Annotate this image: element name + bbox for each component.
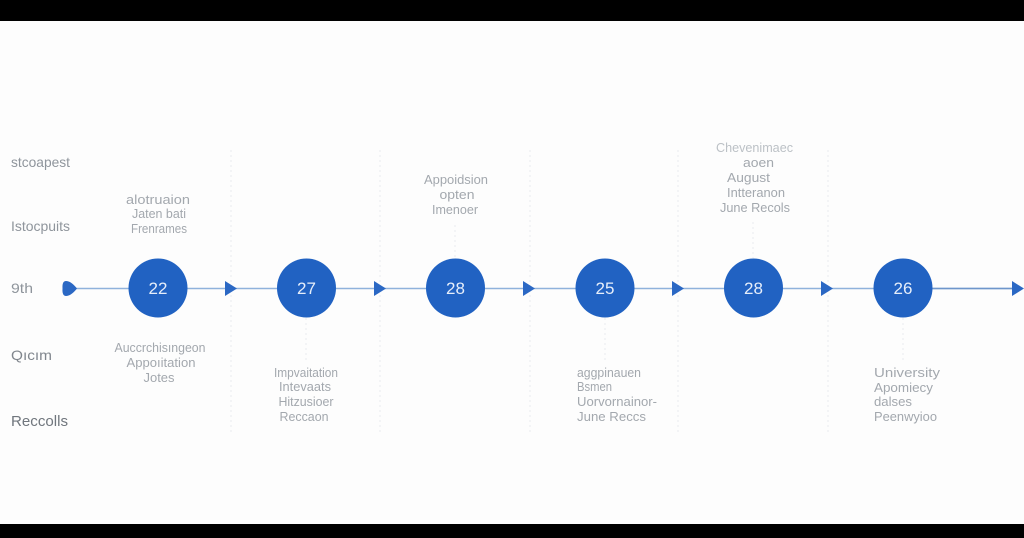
text block below node 25: June Reccs — [577, 409, 647, 424]
node 28: 28 — [446, 279, 465, 298]
row labels: Reccolls — [11, 413, 68, 430]
text block above node 28: Appoidsion — [424, 172, 488, 187]
node 26: 26 — [894, 279, 912, 298]
text block above node 22: alotruaion — [126, 192, 190, 207]
text block below node 22: Auccrchisıngeon — [114, 340, 206, 355]
node 27 — [277, 258, 336, 318]
node 22 — [128, 258, 188, 318]
row labels: Qıcım — [11, 347, 52, 363]
text block above node 22: Jaten bati — [132, 206, 186, 221]
node 28 — [426, 258, 485, 318]
text block below node 25: Uorvornainor- — [577, 394, 657, 409]
text block below node 26: University — [874, 365, 941, 380]
text block below node 27: Intevaats — [279, 379, 331, 394]
node 27: 27 — [297, 279, 316, 298]
arrows — [225, 281, 1024, 296]
text block above node 28 — [424, 172, 488, 217]
node 26 — [874, 258, 932, 318]
text block above node 22 — [126, 192, 190, 236]
text block above node 28: Imenoer — [432, 202, 479, 217]
row labels: Istocpuits — [11, 218, 70, 234]
text block below node 22: Appoıitation — [126, 355, 196, 370]
text block below node 26: Apomiecy — [874, 380, 934, 395]
text block below node 25: aggpinauen — [577, 365, 641, 380]
start marker — [62, 281, 77, 296]
text block below node 27: Reccaon — [280, 409, 328, 424]
text block below node 26: dalses — [874, 394, 913, 409]
row labels: 9th — [11, 280, 33, 296]
text block below node 22: Jotes — [144, 370, 175, 385]
text block below node 27: Hitzusioer — [278, 394, 334, 409]
row labels — [11, 154, 70, 430]
text block below node 25: Bsmen — [577, 379, 612, 394]
text block below node 25 — [577, 365, 657, 424]
node 25 — [576, 258, 634, 318]
text block above node 28 second: Intteranon — [727, 185, 785, 200]
text block above node 28 second: Chevenimaec — [716, 140, 793, 155]
text block below node 26 — [874, 365, 941, 424]
node 28 second: 28 — [744, 279, 763, 298]
node 25: 25 — [596, 279, 614, 298]
text block above node 28 second: aoen — [743, 155, 774, 170]
text block above node 28 second: June Recols — [720, 200, 790, 215]
node 28 second — [724, 258, 783, 318]
vertical guide lines — [231, 150, 903, 435]
node 22: 22 — [149, 279, 167, 298]
text block above node 28: opten — [440, 187, 474, 202]
timeline axis — [70, 288, 1014, 290]
text block below node 22 — [114, 340, 206, 385]
text block below node 27 — [274, 365, 338, 424]
text block above node 28 second — [716, 140, 793, 215]
text block above node 22: Frenrames — [131, 221, 187, 236]
text block below node 26: Peenwyioo — [874, 409, 937, 424]
text block above node 28 second: August — [727, 170, 770, 185]
row labels: stcoapest — [11, 154, 70, 170]
text block below node 27: Impvaitation — [274, 365, 338, 380]
